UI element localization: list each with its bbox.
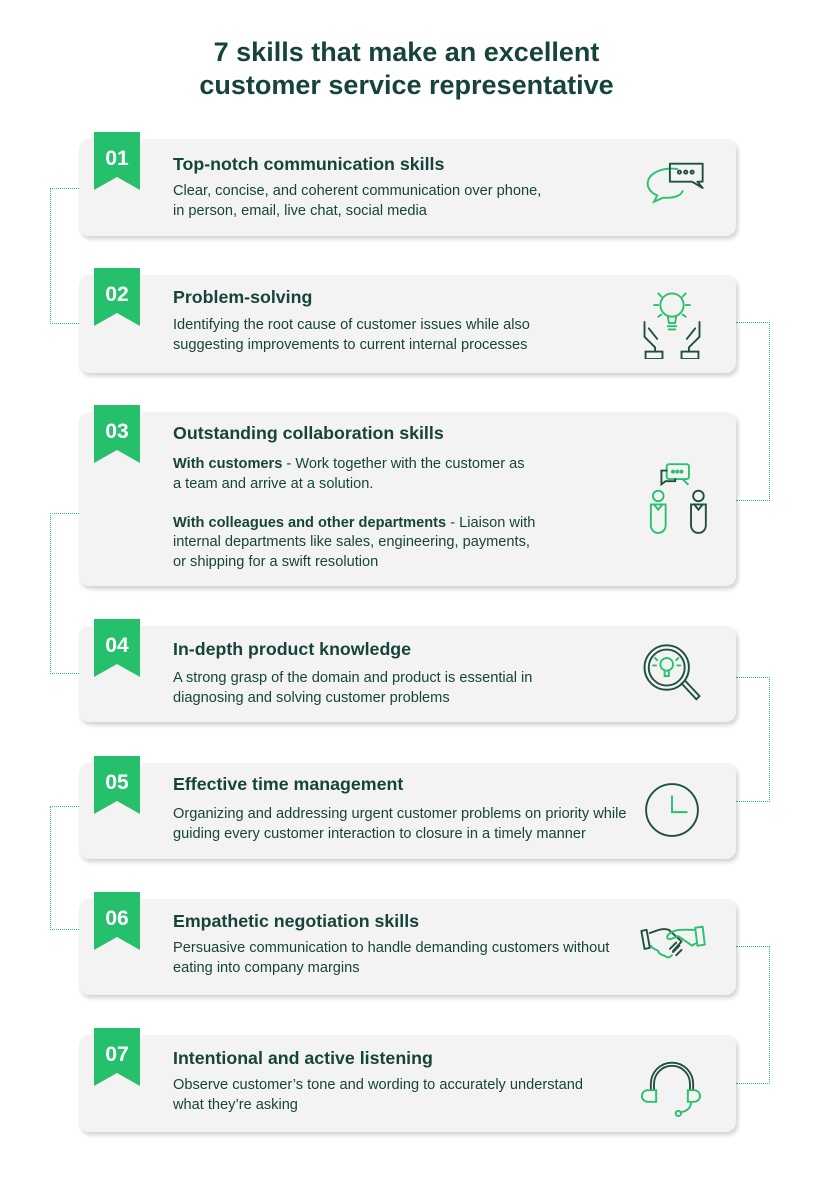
ribbon 05: 05 [105,771,129,794]
text: or shipping for a swift resolution [173,554,378,570]
text: With colleagues and other departments - Liaison with [173,514,535,530]
text: With customers - Work together with the customer as [173,456,525,472]
text [173,940,610,976]
heading: Top-notch communication skills [173,154,444,174]
connector left 3-4 [50,513,79,674]
text [173,183,541,218]
text: Clear, concise, and coherent communication over phone, [173,183,541,199]
ribbon 07: 07 [105,1043,129,1066]
ribbon 03: 03 [105,420,129,443]
text: eating into company margins [173,960,360,976]
ribbon 01 [94,132,140,190]
connector left 5-6 [50,806,79,930]
text [173,317,530,352]
ribbon 01: 01 [105,147,129,170]
title [199,37,614,100]
icon: chat bubbles [646,162,704,204]
ribbon 02: 02 [105,283,129,306]
panel: 07 listening [79,1035,736,1132]
icon: clock [645,783,699,837]
title: 7 skills that make an excellent [214,37,599,67]
text: guiding every customer interaction to closure in a timely manner [173,826,586,842]
panel: 05 time management [79,763,736,859]
heading: Problem-solving [173,287,312,307]
text: suggesting improvements to current internal processes [173,336,527,352]
icon: two people talking [650,463,707,534]
panel: 02 problem solving [79,275,736,373]
title: customer service representative [199,70,614,100]
text: diagnosing and solving customer problems [173,690,450,706]
text: internal departments like sales, engineering, payments, [173,534,530,550]
heading: Outstanding collaboration skills [173,423,444,443]
ribbon 05 [94,756,140,814]
heading: Intentional and active listening [173,1048,433,1068]
text: in person, email, live chat, social media [173,202,427,218]
ribbon 02 [94,268,140,326]
text [173,670,532,706]
text: Observe customer’s tone and wording to accurately understand [173,1077,583,1093]
text: Organizing and addressing urgent customer problems on priority while [173,806,626,822]
heading: Empathetic negotiation skills [173,911,419,931]
ribbon 06: 06 [105,907,129,930]
connector left 1-2 [50,188,79,324]
panel: 03 collaboration [79,412,736,586]
text: a team and arrive at a solution. [173,476,373,492]
heading: Effective time management [173,774,403,794]
text: Identifying the root cause of customer issues while also [173,317,530,333]
ribbon 04 [94,619,140,677]
ribbon 03 [94,405,140,463]
heading: In-depth product knowledge [173,639,411,659]
text [173,456,535,570]
panel: 01 communication [79,139,736,236]
text: Persuasive communication to handle demanding customers without [173,940,609,956]
panel: 06 negotiation [79,899,736,995]
icon: headset [640,1062,701,1117]
ribbon 06 [94,892,140,950]
ribbon 07 [94,1028,140,1086]
icon: lightbulb in hands [644,292,700,359]
text: A strong grasp of the domain and product is essential in [173,670,532,686]
connector right 6-7 [736,946,770,1084]
text [173,806,626,842]
ribbon 04: 04 [105,634,129,657]
text [173,1077,583,1112]
icon: magnifier with bulb [644,644,701,701]
connector right 2-3 [736,322,770,501]
text: what they’re asking [173,1096,298,1112]
connector right 4-5 [736,677,770,802]
panel: 04 product knowledge [79,626,736,722]
icon: handshake [640,926,706,958]
